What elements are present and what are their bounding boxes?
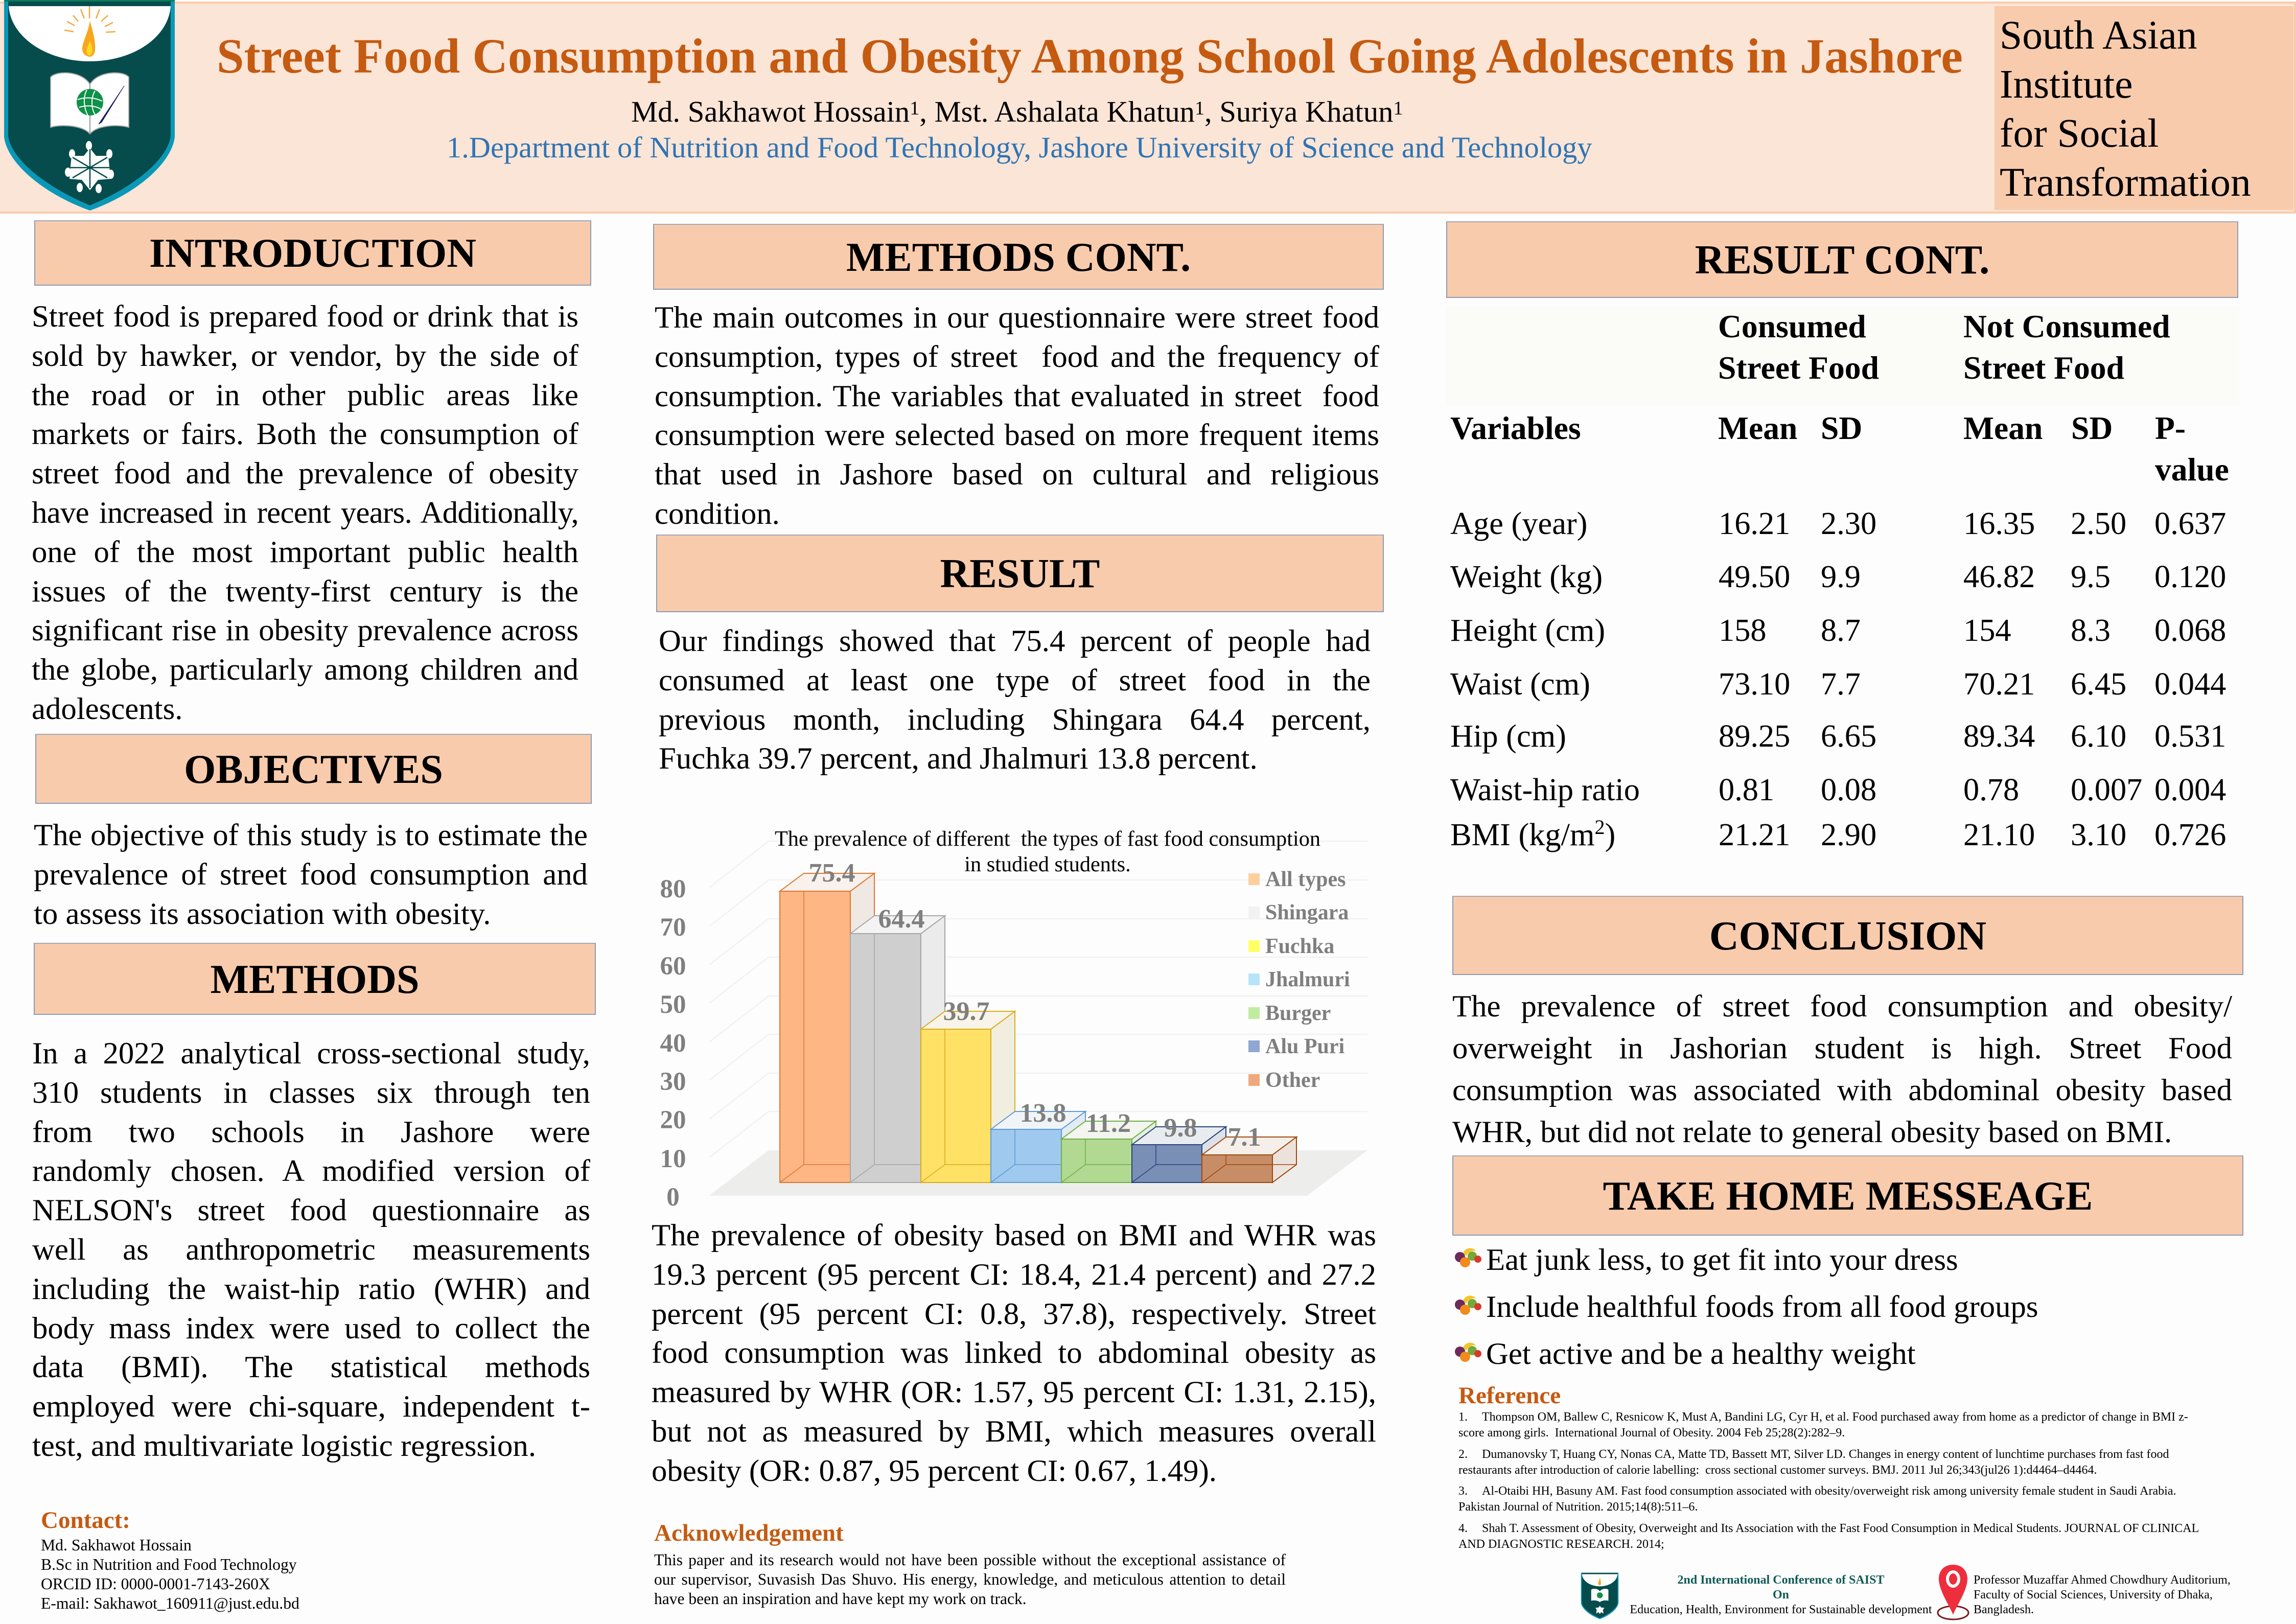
row: waist: 73.10 [1719,666,1790,702]
row: age: 16.21 [1719,506,1790,541]
row: height: 154 [1963,613,2011,648]
text: methods cont.: consumption, types of street food and the frequency of [655,340,1379,374]
text: introduction: sold by hawker, or vendor, by the side of [32,339,578,373]
table header: SD [1821,410,1862,446]
row: bmi [1450,816,2226,852]
data labels: 39.7 [943,997,989,1026]
text: obesity findings [652,1218,1376,1488]
conference details: On [1773,1588,1789,1602]
row: waist-hip ratio: 0.81 [1719,772,1774,807]
row: age: 0.637 [2154,506,2226,541]
text: methods: body mass index were used to collect the [32,1311,590,1345]
text: methods cont. [655,300,1379,531]
table: street food comparison [1450,308,2229,852]
legend [1248,868,1350,1092]
institute name box: for Social [2000,111,2159,156]
bar: alu puri 9.8 [1132,1127,1226,1182]
text: introduction: significant rise in obesity prevalence across [32,613,578,647]
contact details: E-mail: Sakhawot_160911@just.edu.bd [41,1594,299,1612]
table header: Variables [1450,410,1581,446]
legend: Alu Puri [1265,1035,1345,1058]
row: height: 158 [1719,613,1767,648]
venue address: Bangladesh. [1974,1603,2034,1616]
text: introduction [32,299,578,726]
legend: Fuchka [1265,935,1334,958]
text: result: consumed at least one type of street food in the [659,663,1371,698]
icon: fruit bullet [1455,1248,1481,1267]
y axis labels: 80 [660,875,686,903]
text: methods: test, and multivariate logistic regression. [32,1429,536,1463]
contact details: B.Sc in Nutrition and Food Technology [41,1556,297,1573]
bar: fuchka 39.7 [921,1011,1015,1182]
bullet text 3: Get active and be a healthy weight [1486,1337,1916,1371]
heading: take home message [1452,1155,2243,1236]
row: hip [1450,718,2226,754]
contact details [41,1536,299,1612]
row: waist: 0.044 [2154,666,2226,702]
header band [0,2,2296,214]
text: obesity findings: food consumption was linked to abdominal obesity as [652,1336,1376,1370]
conference details [1628,1573,1934,1621]
text: methods: NELSON's street food questionnaire as [32,1193,590,1227]
reference list [1458,1409,2205,1552]
row: weight: 0.120 [2154,559,2226,594]
row: hip: 6.65 [1821,718,1876,754]
row: age: 2.50 [2071,506,2126,541]
institute name box: South Asian [2000,13,2197,58]
text: methods: including the waist-hip ratio (WHR) and [32,1272,590,1306]
row: height: Height (cm) [1450,613,1605,648]
row: height: 8.3 [2071,613,2111,648]
row: hip: 0.531 [2154,718,2226,754]
row: height: 0.068 [2154,613,2226,648]
row: waist-hip ratio: 0.08 [1821,772,1876,807]
table header: Street Food [1963,350,2124,386]
text: methods: 310 students in classes six through ten [32,1076,590,1110]
bar: all types 75.4 [780,873,874,1182]
heading: result cont.: RESULT CONT. [1695,238,1989,283]
bullet text 1: Eat junk less, to get fit into your dress [1486,1243,1958,1277]
text: obesity findings: but not as measured by BMI, which measures overall [652,1414,1376,1449]
heading: methods cont.: METHODS CONT. [846,235,1191,280]
contact details: ORCID ID: 0000-0001-7143-260X [41,1575,270,1593]
row: waist: 6.45 [2071,666,2126,702]
acknowledgement heading: Acknowledgement [654,1520,844,1546]
text: objectives [34,818,588,931]
text: result [659,624,1371,776]
y axis labels: 20 [660,1106,686,1134]
table header: Street Food [1718,350,1879,386]
text: methods cont.: consumption were selected based on more frequent items [655,418,1379,452]
legend: Burger [1265,1002,1331,1025]
icon: institute logo shield [4,0,175,211]
text: introduction: the globe, particularly among children and [32,653,578,687]
y axis labels: 50 [660,990,686,1019]
bar: shingara 64.4 [850,916,945,1182]
chart title: in studied students. [964,852,1131,876]
text: methods cont.: that used in Jashore based on cultural and religious [655,457,1379,492]
text: conclusion: The prevalence of street food consumption and obesity/ [1452,989,2232,1024]
text: methods: employed were chi-square, independent t- [32,1389,590,1424]
row: waist-hip ratio: 0.004 [2154,772,2226,807]
row: weight: 9.9 [1821,559,1861,594]
text: conclusion [1452,989,2232,1149]
heading: methods: METHODS [211,957,419,1002]
heading: methods cont. [653,224,1384,290]
text: methods cont.: The main outcomes in our questionnaire were street food [655,300,1379,335]
legend: Other [1265,1069,1320,1092]
heading: objectives: OBJECTIVES [184,747,443,792]
reference list: score among girls. International Journal of Obesity. 2004 Feb 25;28(2):282–9. [1458,1426,1845,1440]
heading: introduction: INTRODUCTION [149,231,476,276]
text: methods: randomly chosen. A modified version of [32,1154,590,1188]
contact heading: Contact: [41,1507,130,1534]
acknowledgement text [654,1551,1286,1608]
text: obesity findings: percent (95 percent CI: 0.8, 37.8), respectively. Street [652,1297,1376,1331]
text: introduction: adolescents. [32,692,182,726]
reference list: Dumanovsky T, Huang CY, Nonas CA, Matte TD, Bassett MT, Silver LD. Changes in energy content of lunchtime purchases from fast food [1482,1447,2169,1460]
row: hip: Hip (cm) [1450,718,1566,754]
text: objectives: prevalence of street food consumption and [34,857,588,892]
institute name box [1994,6,2293,210]
text: introduction: Street food is prepared food or drink that is [32,299,578,334]
text: conclusion: WHR, but did not relate to general obesity based on BMI. [1452,1115,2172,1149]
row: bmi: 2.90 [1821,817,1876,852]
row: hip: 89.34 [1963,718,2035,754]
reference list: restaurants after introduction of calorie labelling: cross sectional customer surveys. BMJ. 2011 Jul 26;343(jul26 1):d4464–d4464. [1458,1464,2097,1477]
heading: result [656,535,1384,612]
heading: result: RESULT [940,551,1100,596]
text: introduction: have increased in recent years. Additionally, [32,496,578,530]
row: bmi: 21.10 [1963,817,2035,852]
row: weight: 46.82 [1963,559,2035,594]
acknowledgement text: our supervisor, Suvasish Das Shuvo. His energy, knowledge, and meticulous attention to detail [654,1570,1286,1588]
text: result: Our findings showed that 75.4 percent of people had [659,624,1371,658]
venue address [1974,1573,2231,1617]
conference details: Education, Health, Environment for Sustainable development [1630,1603,1932,1616]
text: introduction: street food and the prevalence of obesity [32,456,578,491]
row: age: 16.35 [1963,506,2035,541]
bullet list: take home messages [1455,1243,2038,1371]
row: waist: 7.7 [1821,666,1861,702]
reference list: 3. [1458,1484,1468,1498]
text: introduction: issues of the twenty-first century is the [32,574,578,609]
text: introduction: the road or in other public areas like [32,378,578,412]
row: bmi: 21.21 [1719,817,1790,852]
data labels: 7.1 [1227,1123,1261,1152]
heading: conclusion [1452,896,2243,975]
data labels: 13.8 [1020,1099,1066,1128]
bar: burger 11.2 [1061,1121,1156,1182]
text: methods: from two schools in Jashore were [32,1115,590,1149]
row: hip: 6.10 [2071,718,2126,754]
row: age: 2.30 [1821,506,1876,541]
text: methods cont.: condition. [655,497,780,531]
heading: conclusion: CONCLUSION [1709,914,1986,959]
legend: Jhalmuri [1265,968,1350,991]
row: age: Age (year) [1450,506,1587,541]
row: bmi: BMI (kg/m [1450,817,1594,852]
affiliation: 1.Department of Nutrition and Food Technology, Jashore University of Science and Technology [447,131,1592,164]
venue address: Professor Muzaffar Ahmed Chowdhury Auditorium, [1974,1573,2231,1587]
row: waist-hip ratio: Waist-hip ratio [1450,772,1640,807]
y axis labels: 0 [666,1183,680,1212]
table header: P- [2155,410,2186,446]
icon: small institute logo [1580,1572,1619,1621]
reference list: Al-Otaibi HH, Basuny AM. Fast food consumption associated with obesity/overweight risk among university female student in Saudi Arabia. [1482,1484,2176,1498]
data labels: 11.2 [1086,1109,1131,1138]
heading: take home message: TAKE HOME MESSEAGE [1603,1173,2093,1218]
text: methods: data (BMI). The statistical methods [32,1350,590,1384]
row: waist: Waist (cm) [1450,666,1590,702]
table header: Consumed [1718,308,1866,344]
acknowledgement text: This paper and its research would not have been possible without the exceptional assistance of [654,1551,1286,1569]
text: result: Fuchka 39.7 percent, and Jhalmuri 13.8 percent. [659,741,1258,776]
text: methods [32,1036,590,1463]
reference list: Thompson OM, Ballew C, Resnicow K, Must A, Bandini LG, Cyr H, et al. Food purchased away from home as a predictor of change in BMI z- [1482,1410,2188,1424]
table header: value [2155,451,2229,488]
row: weight: Weight (kg) [1450,559,1603,594]
row: weight [1450,559,2226,594]
text: introduction: markets or fairs. Both the consumption of [32,417,578,451]
text: introduction: one of the most important public health [32,535,578,569]
y axis labels: 60 [660,952,686,981]
row: waist-hip ratio [1450,772,2226,807]
table header [1450,308,2229,488]
y axis labels: 40 [660,1029,686,1058]
row: bmi: ) [1605,817,1615,852]
text: methods: In a 2022 analytical cross-sectional study, [32,1036,590,1071]
row: bmi: 0.726 [2154,817,2226,852]
reference list: 4. [1458,1522,1468,1535]
conference details: 2nd International Conference of SAIST [1678,1573,1884,1587]
y axis labels: 70 [660,913,686,942]
authors: Md. Sakhawot Hossain1, Mst. Ashalata Khatun1, Suriya Khatun1 [631,95,1403,128]
reference list: 2. [1458,1447,1468,1460]
chart title [775,827,1320,876]
institute name box: Institute [2000,62,2133,107]
row: waist-hip ratio: 0.78 [1963,772,2019,807]
text: conclusion: overweight in Jashorian student is high. Street Food [1452,1031,2232,1065]
y axis labels [660,875,686,1212]
row: weight: 9.5 [2071,559,2111,594]
row: height: 8.7 [1821,613,1861,648]
acknowledgement block [654,1520,1286,1608]
text: objectives: to assess its association with obesity. [34,897,491,931]
row: weight: 49.50 [1719,559,1790,594]
text: methods cont.: consumption. The variables that evaluated in street food [655,379,1379,413]
text: obesity findings: The prevalence of obesity based on BMI and WHR was [652,1218,1376,1252]
bar: jhalmuri 13.8 [991,1111,1085,1182]
text: obesity findings: obesity (OR: 0.87, 95 percent CI: 0.67, 1.49). [652,1454,1217,1488]
row: hip: 89.25 [1719,718,1790,754]
reference list: AND DIAGNOSTIC RESEARCH. 2014; [1458,1537,1664,1550]
reference list: Shah T. Assessment of Obesity, Overweight and Its Association with the Fast Food Consumption in Medical Students. JOURNAL OF CLINICAL [1482,1522,2199,1535]
row: waist [1450,666,2226,702]
text: result: previous month, including Shingara 64.4 percent, [659,703,1371,737]
contact details: Md. Sakhawot Hossain [41,1536,192,1554]
institute name box: Transformation [2000,160,2251,205]
row: waist: 70.21 [1963,666,2035,702]
text: methods: well as anthropometric measurements [32,1233,590,1267]
y axis labels: 10 [660,1145,686,1173]
data labels: 75.4 [808,859,855,888]
reference heading: Reference [1458,1382,1561,1409]
row: waist-hip ratio: 0.007 [2071,772,2142,807]
heading: result cont. [1446,221,2238,298]
contact block [41,1507,299,1612]
table header: SD [2071,410,2113,446]
table header: Mean [1718,410,1797,446]
reference list: 1. [1458,1410,1468,1424]
table header: Mean [1963,410,2043,446]
bullet text 2: Include healthful foods from all food groups [1486,1290,2038,1324]
icon: location pin [1937,1564,1972,1621]
bar chart: prevalence of food types [660,827,1367,1212]
reference list: Pakistan Journal of Nutrition. 2015;14(8):511–6. [1458,1500,1698,1514]
row: age [1450,506,2226,541]
data labels [808,859,1261,1152]
venue address: Faculty of Social Sciences, University of Dhaka, [1974,1588,2213,1602]
data labels: 9.8 [1164,1113,1197,1143]
text: obesity findings: 19.3 percent (95 percent CI: 18.4, 21.4 percent) and 27.2 [652,1258,1376,1292]
row: bmi: 3.10 [2071,817,2126,852]
table header: Not Consumed [1963,308,2170,344]
title: Street Food Consumption and Obesity Among School Going Adolescents in Jashore [217,29,1963,83]
text: obesity findings: measured by WHR (OR: 1.57, 95 percent CI: 1.31, 2.15), [652,1375,1376,1409]
heading: introduction [34,220,591,286]
acknowledgement text: have been an inspiration and have kept my work on track. [654,1590,1027,1608]
bar: other 7.1 [1202,1137,1296,1182]
y axis labels: 30 [660,1068,686,1096]
legend: All types [1265,868,1346,891]
chart floor [709,1150,1367,1196]
text: conclusion: consumption was associated with abdominal obesity based [1452,1073,2232,1107]
row: height [1450,613,2226,648]
row: bmi: 2 [1594,816,1605,839]
icon: fruit bullet [1454,1294,1482,1316]
chart title: The prevalence of different the types of fast food consumption [775,827,1320,851]
heading: methods [34,943,596,1015]
legend: Shingara [1265,901,1349,924]
data labels: 64.4 [878,904,925,934]
text: objectives: The objective of this study is to estimate the [34,818,588,852]
icon: fruit bullet [1454,1341,1482,1363]
heading: objectives [35,734,592,804]
